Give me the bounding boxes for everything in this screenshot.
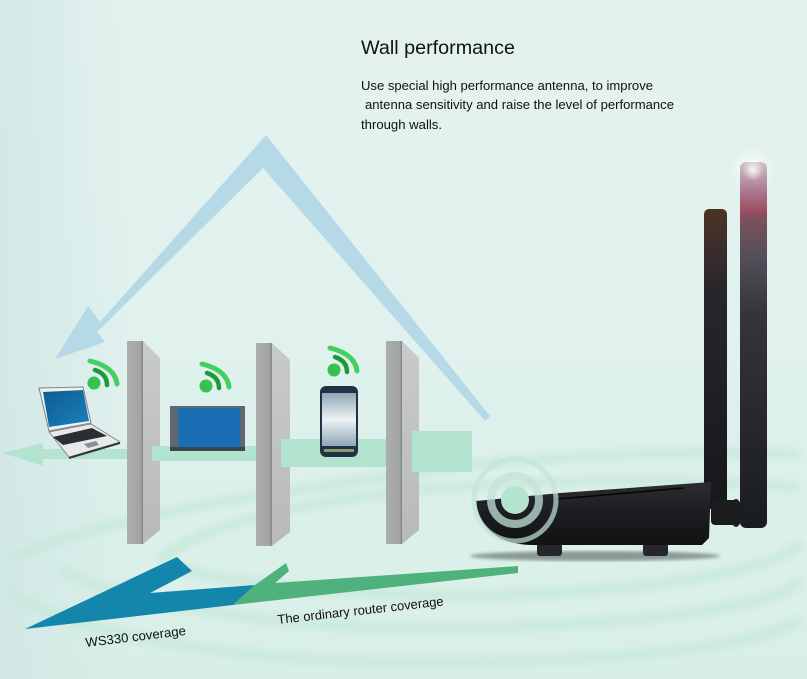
wall 3 <box>386 341 419 544</box>
arrow: WS330 coverage <box>25 557 255 629</box>
text block: description: antenna sensitivity and raise the level of performance <box>365 97 674 112</box>
icon: laptop <box>39 387 120 459</box>
router body <box>476 482 711 545</box>
arrow: blue roof signal path <box>55 135 490 421</box>
arrow: green signal left of wall 1 <box>3 443 127 466</box>
text block: description: through walls. <box>361 117 442 132</box>
icon: wifi on monitor <box>200 364 229 392</box>
router <box>470 146 777 561</box>
text block: description: Use special high performance antenna, to improve <box>361 78 653 93</box>
label: WS330 coverage: WS330 coverage <box>85 623 187 650</box>
arrow: ordinary router coverage <box>233 563 518 605</box>
antenna: right <box>729 146 777 528</box>
wall 2 <box>256 343 290 546</box>
heading: Wall performance: Wall performance <box>361 37 515 59</box>
antenna: left <box>704 209 727 509</box>
text block: description <box>361 78 674 132</box>
label: The ordinary router coverage: The ordinary router coverage <box>277 593 444 627</box>
green signal bars through walls <box>152 431 472 472</box>
icon: smartphone <box>320 386 358 457</box>
wall 1 <box>127 341 160 544</box>
icon: wifi on laptop <box>88 361 117 390</box>
router feet <box>537 543 668 556</box>
signal rings on router <box>474 459 556 541</box>
icon: monitor <box>170 406 245 451</box>
icon: wifi on phone <box>328 348 357 376</box>
antenna hinge <box>711 499 742 527</box>
